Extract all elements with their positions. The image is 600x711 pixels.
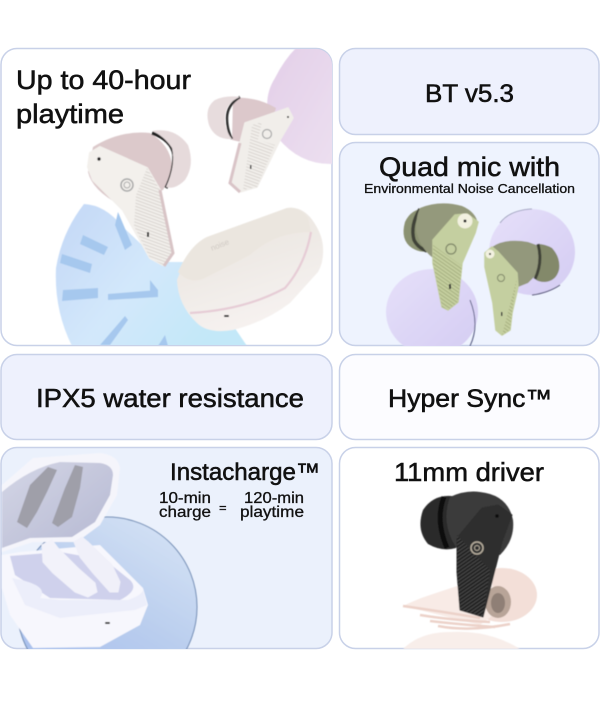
icon: open charging case — [2, 453, 148, 648]
panel: up to 40-hour playtime — [1, 48, 333, 346]
icon: charging case — [177, 208, 323, 331]
panel: IPX5 water resistance — [1, 354, 332, 440]
heading: Hyper Sync: Hyper Sync™ — [388, 385, 552, 413]
panel: BT v5.3 — [340, 48, 599, 134]
heading: quad mic with: Quad mic with — [379, 152, 560, 182]
text: 120-min playtime — [240, 490, 304, 521]
icon: black earbud — [420, 492, 513, 617]
icon: charging case: noise — [209, 237, 231, 253]
icon: pink sound waves — [403, 568, 537, 649]
icon: lilac disc — [267, 48, 333, 164]
text: 10-min charge: charge — [159, 504, 211, 521]
text: equals: = — [219, 500, 227, 515]
icon: lilac discs — [386, 209, 575, 355]
text: 120-min playtime: 120-min — [244, 490, 304, 507]
icon: right green earbud — [485, 241, 559, 335]
heading: up to 40-hour: Up to 40-hour — [16, 65, 191, 95]
panel: quad mic — [340, 142, 599, 355]
heading: 11mm driver: 11mm driver — [394, 457, 544, 487]
icon: left earbud — [88, 130, 191, 266]
icon: right earbud — [207, 96, 293, 192]
icon: left green earbud — [404, 203, 478, 310]
heading: BT v5.3: BT v5.3 — [425, 80, 514, 108]
heading: IPX5 water resistance: IPX5 water resistance — [36, 383, 304, 413]
icon: blue clock disc — [56, 204, 247, 346]
panel: 11mm driver — [340, 448, 599, 649]
text: 10-min charge — [159, 490, 211, 521]
text: 10-min charge: 10-min — [159, 490, 211, 507]
text: 120-min playtime: playtime — [240, 504, 304, 521]
heading: playtime: playtime — [16, 99, 124, 129]
heading: Instacharge: Instacharge™ — [170, 459, 320, 486]
subheading: environmental noise cancellation: Environmental Noise Cancellation — [364, 182, 575, 196]
panel: Instacharge — [0, 446, 333, 650]
icon: blue glass disc — [18, 516, 198, 649]
panel: Hyper Sync — [340, 354, 599, 440]
